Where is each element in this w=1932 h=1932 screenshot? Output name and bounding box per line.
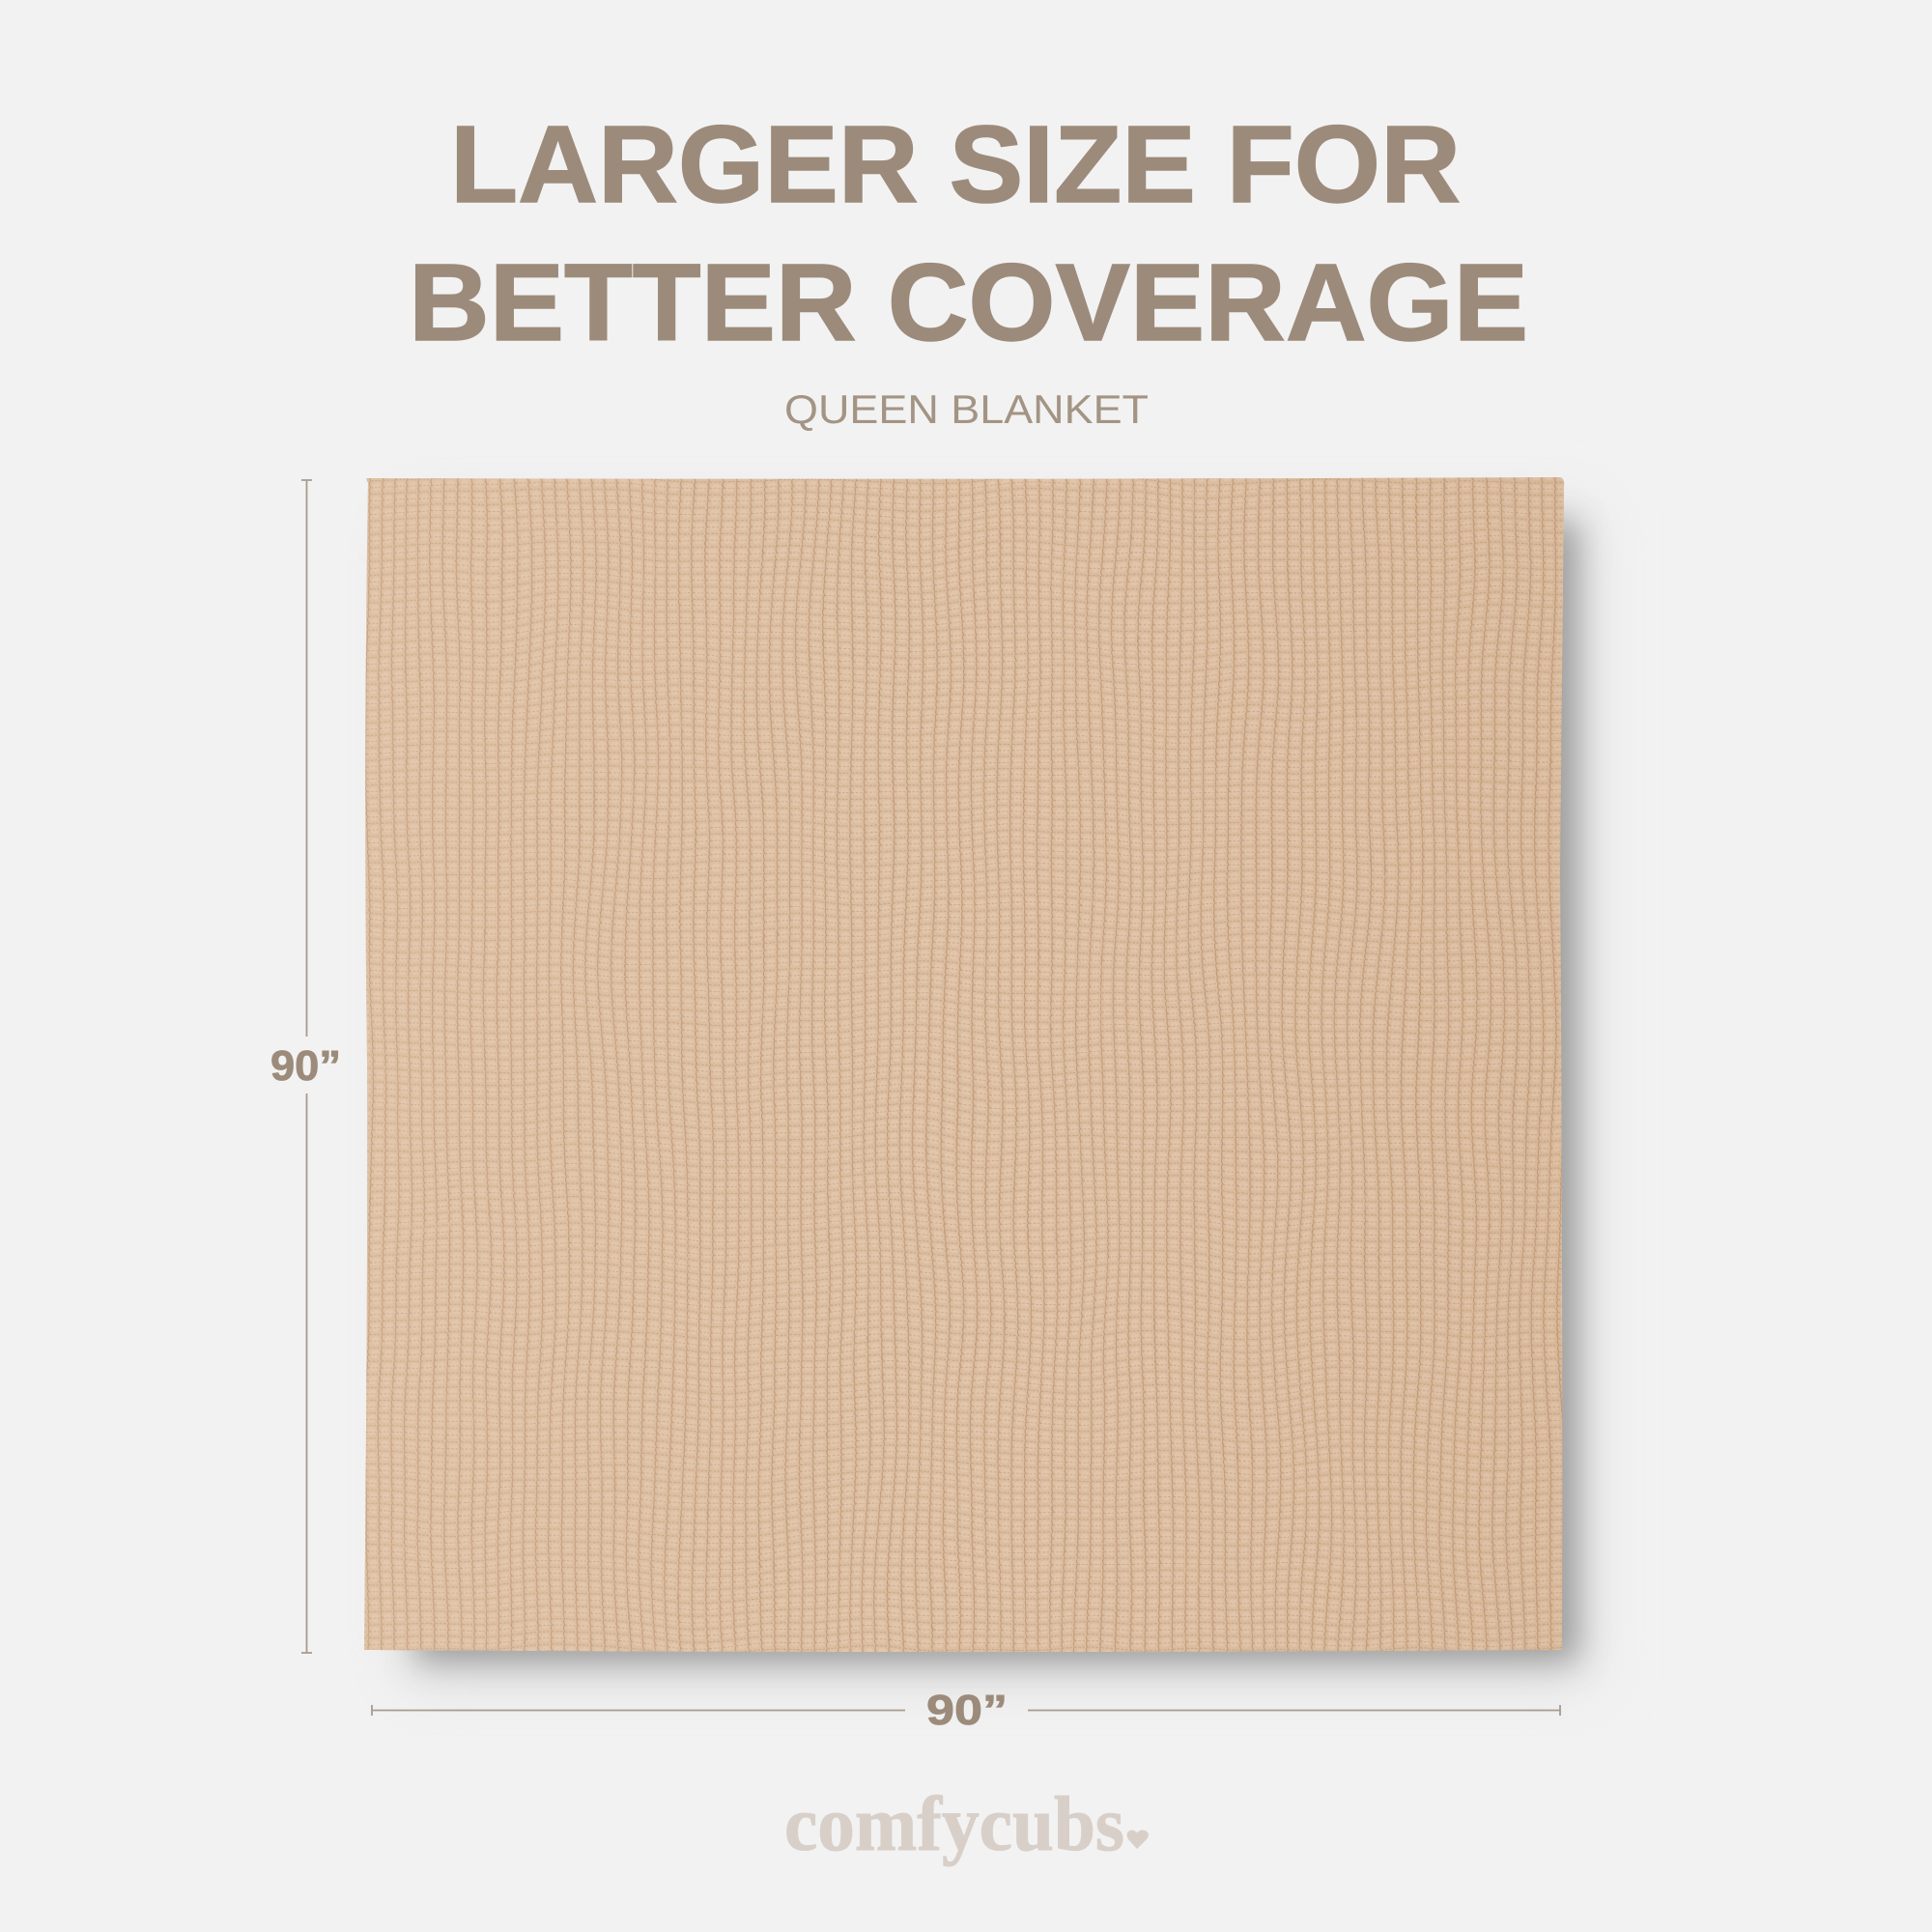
title [409,103,1528,363]
blanket [338,449,1594,1681]
title: BETTER COVERAGE [409,242,1528,363]
horizontal dimension: 90 inches [372,1687,1560,1734]
vertical dimension: 90 inches: 90” [270,1042,341,1090]
subtitle: QUEEN BLANKET [784,386,1149,432]
logo: comfycubs: comfycubs [784,1782,1124,1867]
title: LARGER SIZE FOR [450,103,1461,225]
blanket shadow [406,512,1589,1681]
horizontal dimension: 90 inches: 90” [926,1687,1008,1734]
icon: heart [1127,1831,1149,1849]
vertical dimension: 90 inches [270,480,341,1653]
